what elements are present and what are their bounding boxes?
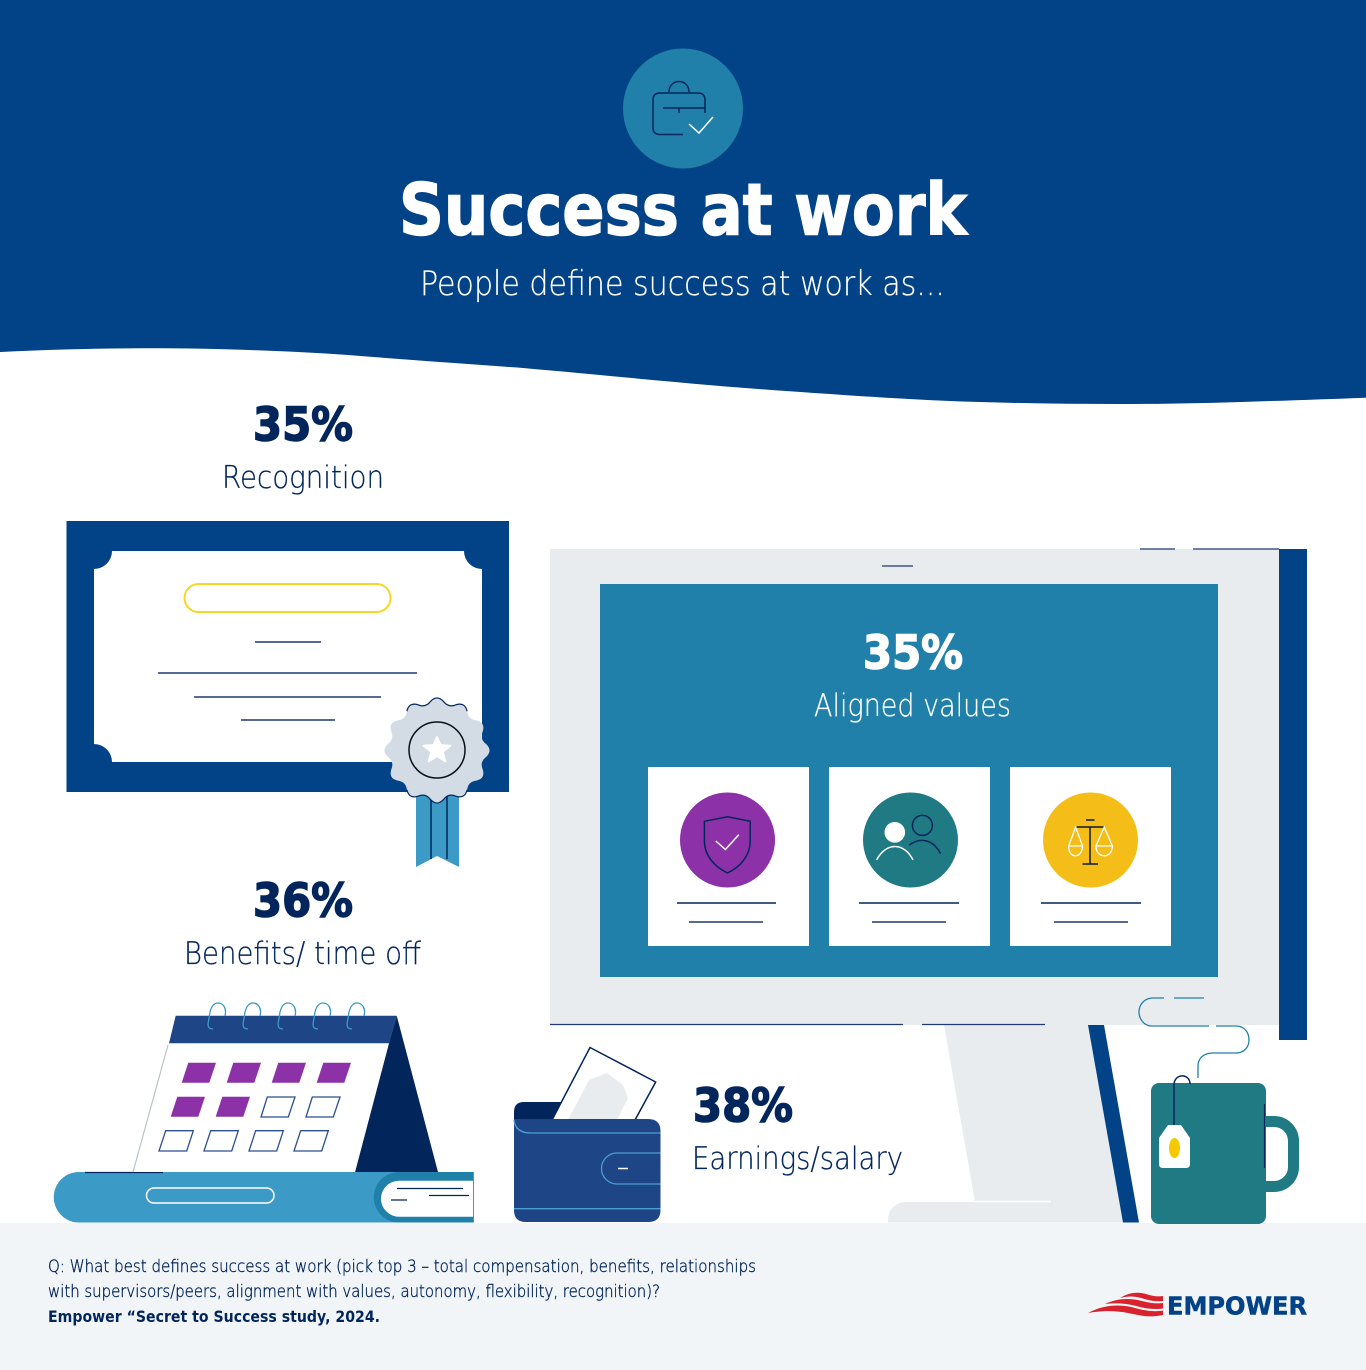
logo: Empower [1088,1292,1307,1320]
stat: recognition: 35% [253,398,353,452]
stat: aligned values [814,626,1011,724]
tea tag [1159,1125,1190,1168]
calendar page [133,1043,389,1172]
mug illustration [1139,998,1294,1224]
footer band [0,1223,1366,1370]
stat: recognition: Recognition [222,460,384,496]
subtitle: People define success at work as... [420,264,945,304]
seal [384,698,490,803]
stat: aligned values: Aligned values [814,688,1011,724]
stat: aligned values: 35% [863,626,963,680]
icon: briefcase with check [623,48,743,168]
title: Success at work [399,168,969,252]
stat: earnings: 38% [693,1078,793,1132]
calendar rings [208,1003,365,1029]
footnote: Empower “Secret to Success study, 2024. [48,1307,380,1326]
stat: earnings [692,1078,903,1177]
stat: benefits [184,874,422,972]
calendar header [169,1016,397,1043]
calendar stand [355,1016,438,1172]
logo: Empower: EMPOWER [1167,1292,1307,1320]
footnote [48,1257,756,1326]
calendar days [159,1063,351,1151]
ribbon [416,790,459,867]
monitor screen [600,584,1218,977]
header band with wave [0,0,1366,404]
calendar on book illustration [54,1003,474,1222]
card: people [829,767,990,946]
certificate illustration [66,521,509,867]
footnote: Q: What best defines success at work (pick top 3 – total compensation, benefits, relationships [48,1257,756,1276]
stat: benefits: 36% [253,874,353,928]
banknote [552,1048,656,1120]
footnote: with supervisors/peers, alignment with values, autonomy, flexibility, recognition)? [48,1282,660,1301]
stat: recognition [222,398,384,496]
card: scales [1010,767,1171,946]
wallet illustration [514,1048,660,1222]
stat: benefits: Benefits/ time off [184,936,422,972]
stat: earnings: Earnings/salary [692,1141,903,1177]
card: shield [648,767,809,946]
book [54,1172,474,1222]
steam [1139,998,1249,1078]
monitor illustration [550,549,1307,1222]
